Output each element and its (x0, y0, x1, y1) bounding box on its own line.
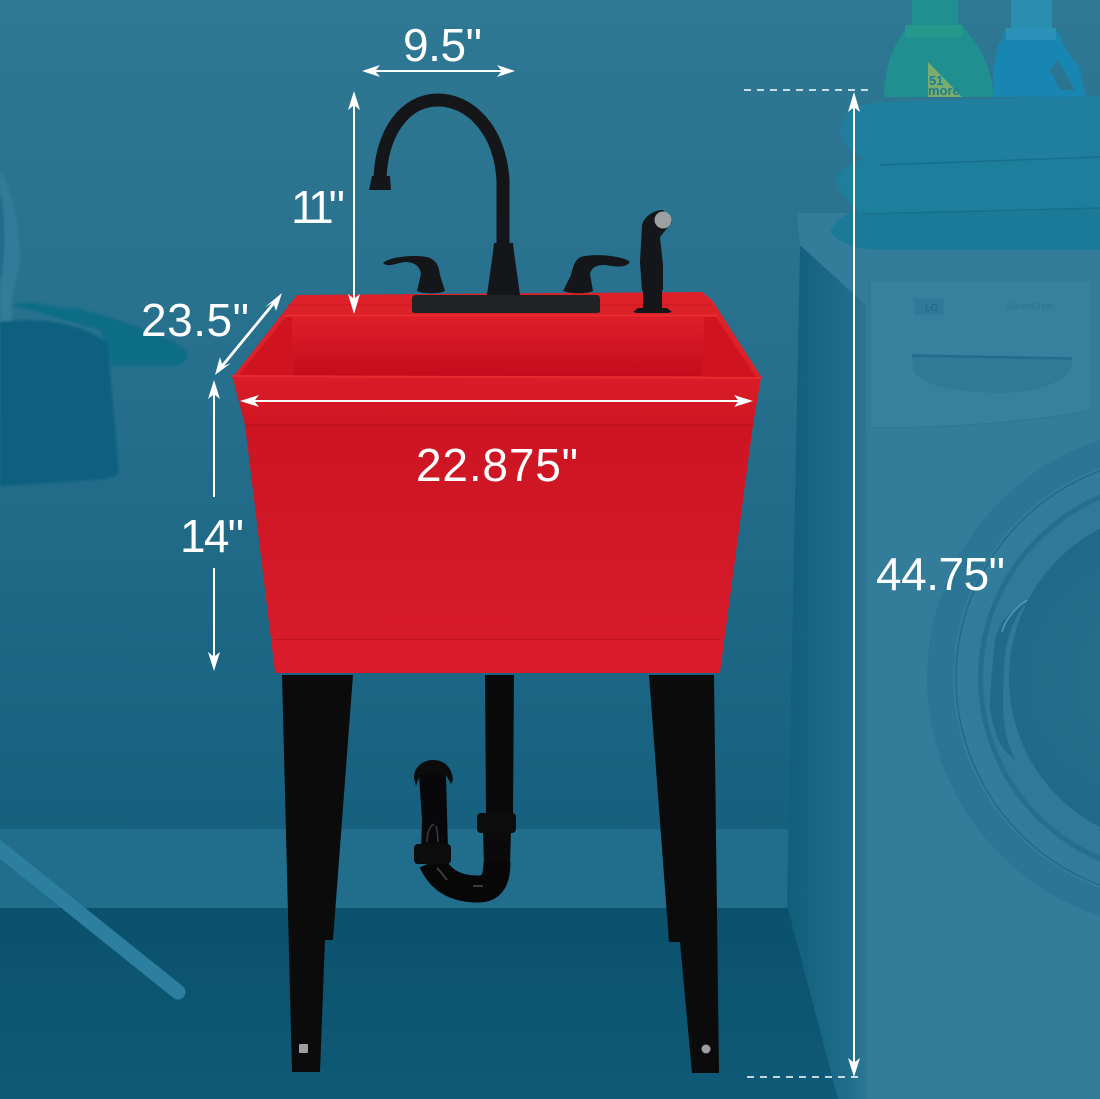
washer front (866, 278, 1100, 1099)
basin left wall (238, 317, 294, 376)
sink legs (282, 675, 719, 1073)
detergent bottle: green: more (928, 83, 960, 98)
dimension label: 44.75: 44.75" (876, 548, 1005, 600)
detergent drawer handle (912, 355, 1072, 393)
floor (0, 908, 860, 1099)
faucet (369, 100, 630, 313)
washer: LG (925, 303, 939, 314)
dimension label: 9.5: 9.5" (403, 19, 482, 71)
red sink tub (232, 292, 762, 673)
control panel (870, 280, 1092, 428)
front rim (232, 375, 761, 425)
drain P-trap (414, 675, 516, 889)
spout tip (369, 176, 391, 190)
wall background (0, 0, 1100, 835)
dimension: 44.75 inch total height arrow (848, 92, 860, 1077)
top dashed guide line (744, 89, 870, 91)
basin back wall (292, 317, 704, 376)
right leg (649, 675, 719, 1073)
bottom dashed guide line (747, 1076, 863, 1078)
tailpiece pipe (485, 675, 514, 815)
brand mark: SteamDryer (1006, 301, 1054, 311)
baseboard (0, 829, 800, 909)
side sprayer (633, 210, 672, 313)
left handle (383, 256, 445, 293)
basin top edge (285, 314, 718, 316)
tub body (245, 425, 753, 672)
dimension: 11 inch height arrow (348, 91, 360, 314)
bottom band (274, 640, 721, 673)
dimension: 22.875 inch width arrow (240, 395, 753, 407)
washer top (797, 213, 1100, 307)
left arm (419, 775, 448, 850)
washer door (940, 441, 1100, 915)
ironing board leg (0, 846, 178, 992)
dimension: 9.5 inch width arrow (362, 65, 515, 77)
dimension: 14 inch height arrow (208, 380, 220, 671)
right leg bolt (702, 1044, 710, 1054)
deck plate (412, 295, 600, 313)
detergent bottle: blue (993, 0, 1086, 97)
ironing board and garment at left (0, 170, 187, 486)
deck ledge line (288, 304, 712, 306)
washer (787, 213, 1100, 1099)
left slip nut (414, 844, 451, 864)
bottle label: 51 (929, 73, 943, 88)
dimension label: 23.5: 23.5" (141, 294, 249, 346)
right slip nut (477, 813, 516, 833)
gooseneck spout (380, 100, 503, 246)
dimension: 23.5 inch depth arrow (215, 293, 282, 375)
left leg (282, 675, 353, 1072)
dimension label: 14: 14" (180, 510, 244, 562)
basin right wall (702, 317, 756, 377)
dimension label: 22.875: 22.875" (416, 439, 578, 491)
LG logo (914, 298, 944, 315)
pipe highlights (427, 824, 438, 842)
detergent bottle: green (884, 0, 994, 98)
faucet base (487, 243, 520, 295)
right handle (563, 255, 630, 293)
left leg bolt (299, 1044, 308, 1053)
dimension label: 11: 11" (291, 181, 345, 233)
U bend (432, 862, 497, 889)
rear deck (232, 292, 762, 378)
sprayer nozzle (654, 212, 672, 228)
folded towels (830, 96, 1100, 250)
washer side panel (787, 245, 868, 1099)
left flange (414, 760, 453, 786)
